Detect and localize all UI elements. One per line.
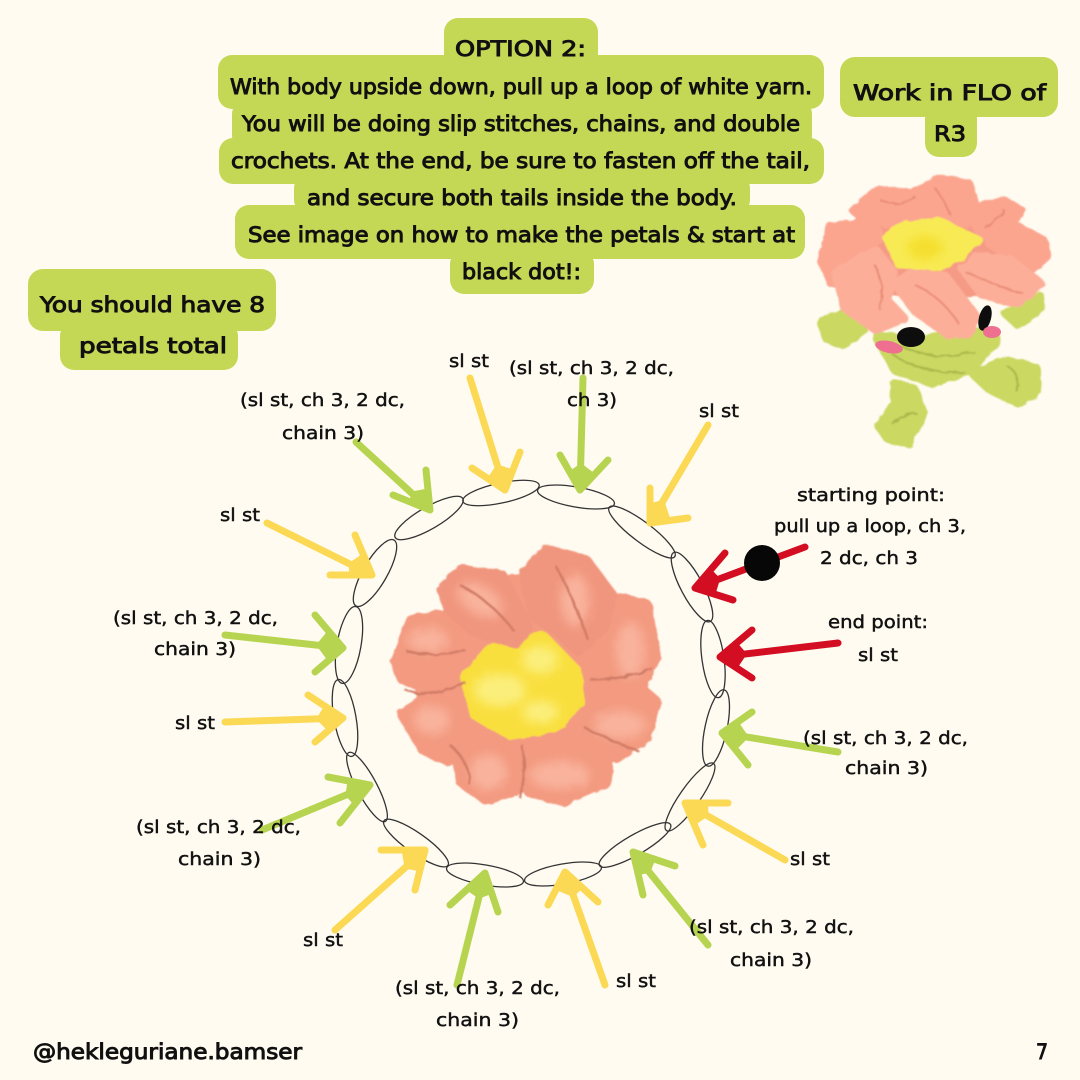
arrow: yellow, top left centre [470, 378, 520, 490]
label: right stitch: (sl st, ch 3, 2 dc, [803, 728, 968, 749]
label: sl st lower left: sl st [303, 930, 343, 951]
arrow: yellow, top right [650, 425, 708, 523]
arrow: green, lower left [262, 777, 370, 830]
label: end point [828, 612, 928, 666]
arrow: red, end point [720, 630, 838, 678]
crochet chain ring [327, 475, 735, 892]
callout: 8 petals total [28, 269, 276, 370]
callout: option 2 instructions: black dot!: [462, 260, 581, 284]
arrow: yellow, left [225, 695, 343, 742]
label: upper left stitch: chain 3) [154, 639, 236, 660]
callout: option 2 instructions: See image on how to make the petals & start at [248, 223, 795, 247]
label: bottom stitch: (sl st, ch 3, 2 dc, [395, 978, 560, 999]
label: lower left stitch [136, 817, 301, 870]
photo: finished flower plush [822, 179, 1046, 443]
label: bottom stitch: chain 3) [436, 1010, 519, 1031]
label: lower left stitch: (sl st, ch 3, 2 dc, [136, 817, 301, 838]
label: starting point: 2 dc, ch 3 [820, 548, 918, 569]
arrow: green, bottom left centre [450, 873, 498, 985]
callout: 8 petals total: petals total [79, 334, 227, 358]
label: upper left stitch: (sl st, ch 3, 2 dc, [113, 608, 278, 629]
arrow: green, lower right [633, 852, 708, 945]
arrow: yellow, upper left [267, 523, 372, 575]
label: top centre stitch: ch 3) [567, 390, 617, 411]
callout: work in FLO of R3: R3 [934, 122, 966, 146]
callout: 8 petals total: You should have 8 [39, 293, 265, 317]
callout: option 2 instructions [218, 18, 824, 294]
label: sl st top: sl st [449, 351, 489, 372]
label: end point: end point: [828, 612, 928, 633]
callout: option 2 instructions: You will be doing slip stitches, chains, and double [241, 112, 800, 136]
arrow: yellow, bottom right centre [548, 872, 605, 985]
label: sl st top right: sl st [699, 401, 739, 422]
label: sl st upper left: sl st [220, 505, 260, 526]
label: lower right stitch: (sl st, ch 3, 2 dc, [689, 917, 854, 938]
callout: option 2 instructions: crochets. At the end, be sure to fasten off the tail, [231, 149, 810, 173]
label: top centre stitch [509, 358, 674, 411]
arrow: red, starting point [695, 547, 805, 600]
callout: option 2 instructions: OPTION 2: [455, 37, 586, 61]
label: top left stitch: (sl st, ch 3, 2 dc, [240, 390, 405, 411]
label: end point: sl st [858, 645, 898, 666]
arrow: green, right [722, 712, 838, 765]
callout: option 2 instructions: With body upside down, pull up a loop of white yarn. [230, 75, 812, 99]
arrow: green, upper left [225, 615, 343, 672]
label: sl st bottom: sl st [616, 971, 656, 992]
label: right stitch: chain 3) [845, 758, 928, 779]
callout: work in FLO of R3 [840, 57, 1058, 157]
label: top left stitch [240, 390, 405, 444]
label: lower left stitch: chain 3) [178, 849, 261, 870]
label: starting point: starting point: [797, 485, 945, 506]
arrow: yellow, lower left [335, 850, 425, 930]
label: starting point [774, 485, 966, 569]
photo: flower top view [397, 552, 654, 799]
label: right stitch [803, 728, 968, 779]
label: sl st left: sl st [175, 713, 215, 734]
arrow: green, top centre [560, 378, 608, 490]
label: starting point: pull up a loop, ch 3, [774, 516, 966, 537]
label: sl st lower right: sl st [790, 849, 830, 870]
arrow: yellow, lower right [685, 803, 785, 860]
page number: 7 [1036, 1040, 1048, 1064]
callout: work in FLO of R3: Work in FLO of [853, 81, 1047, 105]
arrow: green, top left [356, 442, 430, 510]
label: upper left stitch [113, 608, 278, 660]
label: lower right stitch: chain 3) [730, 950, 812, 971]
label: lower right stitch [689, 917, 854, 971]
start dot [744, 545, 780, 581]
callout: option 2 instructions: and secure both tails inside the body. [307, 186, 737, 210]
label: top left stitch: chain 3) [282, 423, 364, 444]
footer handle: @hekleguriane.bamser [33, 1040, 302, 1064]
label: bottom stitch [395, 978, 560, 1031]
label: top centre stitch: (sl st, ch 3, 2 dc, [509, 358, 674, 379]
